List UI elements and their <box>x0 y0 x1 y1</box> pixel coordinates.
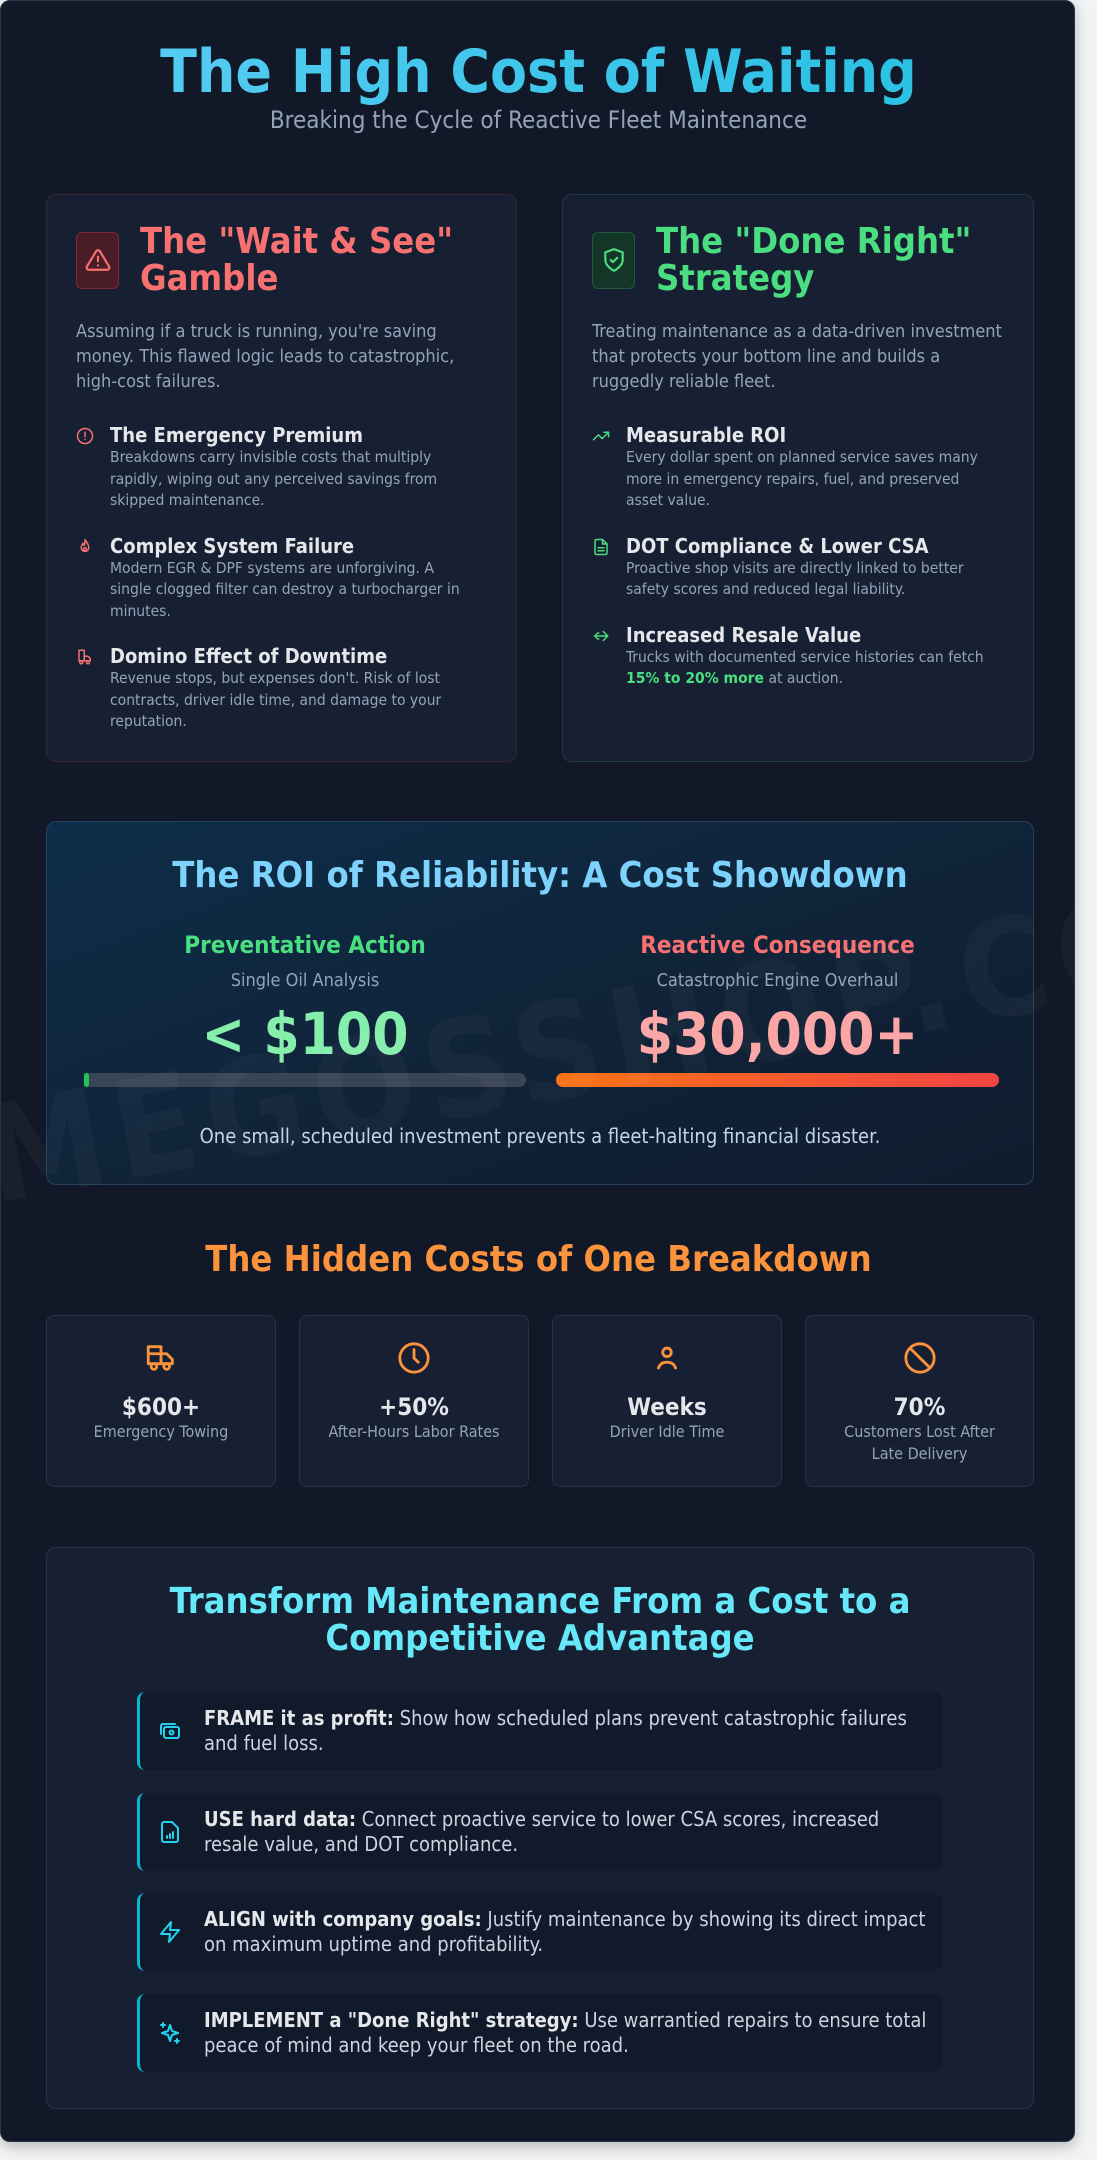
text block: roi footer: One small, scheduled investment prevents a fleet-halting financial disaster. <box>200 1124 880 1148</box>
item: dot compliance: DOT Compliance & Lower CSA <box>626 534 929 558</box>
item: measurable roi <box>592 423 978 509</box>
item: resale value <box>594 622 984 687</box>
step: data: USE hard data: Connect proactive service to lower CSA scores, increased resale value, and DOT compliance. <box>204 1807 879 1856</box>
icon: money <box>160 1723 180 1739</box>
step: frame: FRAME it as profit: Show how scheduled plans prevent catastrophic failures and fuel loss. <box>204 1706 907 1755</box>
item: domino effect: Revenue stops, but expenses don't. Risk of lost contracts, driver idle time, and damage to your reputation. <box>110 669 441 730</box>
item: measurable roi: Measurable ROI <box>626 423 786 447</box>
card: towing: Emergency Towing <box>94 1422 228 1441</box>
card: towing: $600+ <box>122 1393 200 1421</box>
step: implement <box>137 1994 942 2072</box>
icon: lightning <box>160 1921 180 1943</box>
icon: ban <box>904 1342 936 1374</box>
item: dot compliance: Proactive shop visits are directly linked to better safety scores and reduced legal liability. <box>626 558 964 598</box>
item: complex system failure: Modern EGR & DPF systems are unforgiving. A single clogged filter can destroy a turbocharger in minutes. <box>110 558 460 620</box>
column: reactive: Catastrophic Engine Overhaul <box>657 970 898 991</box>
item: emergency premium: Breakdowns carry invisible costs that multiply rapidly, wiping out any perceived savings from skipped maintenance. <box>110 448 437 509</box>
item: resale value: Increased Resale Value <box>626 622 861 646</box>
step: align <box>137 1893 942 1971</box>
item: resale value: Trucks with documented service histories can fetch 15% to 20% more at auction. <box>626 648 984 687</box>
item: domino effect <box>78 644 442 730</box>
icon: tow truck <box>146 1345 174 1371</box>
card: customers <box>805 1315 1034 1487</box>
card: idle: Driver Idle Time <box>610 1422 724 1441</box>
column: reactive: $30,000+ <box>637 1000 918 1068</box>
panel: transform maintenance <box>46 1547 1034 2109</box>
step: data <box>137 1793 942 1871</box>
card: towing <box>46 1315 276 1487</box>
heading: done right <box>592 221 971 299</box>
column: reactive <box>556 931 999 1087</box>
column: preventative: Preventative Action <box>184 931 426 959</box>
item: measurable roi: Every dollar spent on planned service saves many more in emergency repairs, fuel, and preserved asset value. <box>626 448 978 509</box>
text block: strategy description: Treating maintenance as a data-driven investment that protects your bottom line and builds a ruggedly reliable fleet. <box>592 321 1002 392</box>
card: idle <box>552 1315 782 1487</box>
card: customers: 70% <box>894 1393 945 1421</box>
text block: gamble description: Assuming if a truck is running, you're saving money. This flawed logic leads to catastrophic, high-cost failures. <box>76 321 454 392</box>
heading: wait and see: The "Wait & See" <box>140 221 453 262</box>
item: complex system failure: Complex System Failure <box>110 534 354 558</box>
heading: transform: Transform Maintenance From a Cost to a <box>170 1581 910 1622</box>
step: implement: IMPLEMENT a "Done Right" strategy: Use warrantied repairs to ensure total peace of mind and keep your fleet on the road. <box>204 2008 926 2057</box>
title: The High Cost of Waiting <box>160 37 917 107</box>
card: customers: Customers Lost After <box>844 1422 995 1441</box>
item: dot compliance <box>594 534 964 598</box>
column: preventative: Single Oil Analysis <box>231 970 379 991</box>
icon: file chart <box>161 1821 179 1843</box>
heading: wait and see <box>76 221 453 299</box>
panel: wait and see gamble <box>46 194 517 762</box>
subtitle: Breaking the Cycle of Reactive Fleet Maintenance <box>270 106 807 134</box>
panel: roi cost showdown <box>46 821 1034 1185</box>
icon: user <box>657 1346 677 1370</box>
card: customers: Late Delivery <box>872 1444 967 1463</box>
card: idle: Weeks <box>627 1393 707 1421</box>
column: preventative: < $100 <box>201 1000 409 1068</box>
step: frame <box>137 1692 942 1770</box>
heading: transform: Competitive Advantage <box>325 1618 755 1659</box>
title <box>1 38 1076 106</box>
heading: done right: The "Done Right" <box>656 221 971 262</box>
heading: hidden costs: The Hidden Costs of One Breakdown <box>205 1239 872 1280</box>
icon: clock <box>398 1342 430 1374</box>
panel: done right strategy <box>562 194 1034 762</box>
heading: roi: The ROI of Reliability: A Cost Showdown <box>172 855 908 896</box>
icon: warning <box>76 232 119 288</box>
column: preventative <box>84 931 526 1087</box>
card: labor <box>299 1315 529 1487</box>
bar: large <box>556 1073 999 1087</box>
icon: shield check <box>592 232 635 288</box>
item: emergency premium <box>76 423 437 509</box>
item: emergency premium: The Emergency Premium <box>110 423 363 447</box>
item: domino effect: Domino Effect of Downtime <box>110 644 387 668</box>
icon: sparkles <box>160 2022 180 2044</box>
card: labor: After-Hours Labor Rates <box>328 1422 500 1441</box>
heading: done right: Strategy <box>656 258 814 299</box>
heading: wait and see: Gamble <box>140 258 278 299</box>
column: reactive: Reactive Consequence <box>640 931 915 959</box>
item: complex system failure <box>80 534 460 620</box>
card: labor: +50% <box>379 1393 449 1421</box>
bar: small <box>84 1073 526 1087</box>
heading: transform <box>170 1581 910 1659</box>
step: align: ALIGN with company goals: Justify maintenance by showing its direct impact on maximum uptime and profitability. <box>204 1907 925 1956</box>
